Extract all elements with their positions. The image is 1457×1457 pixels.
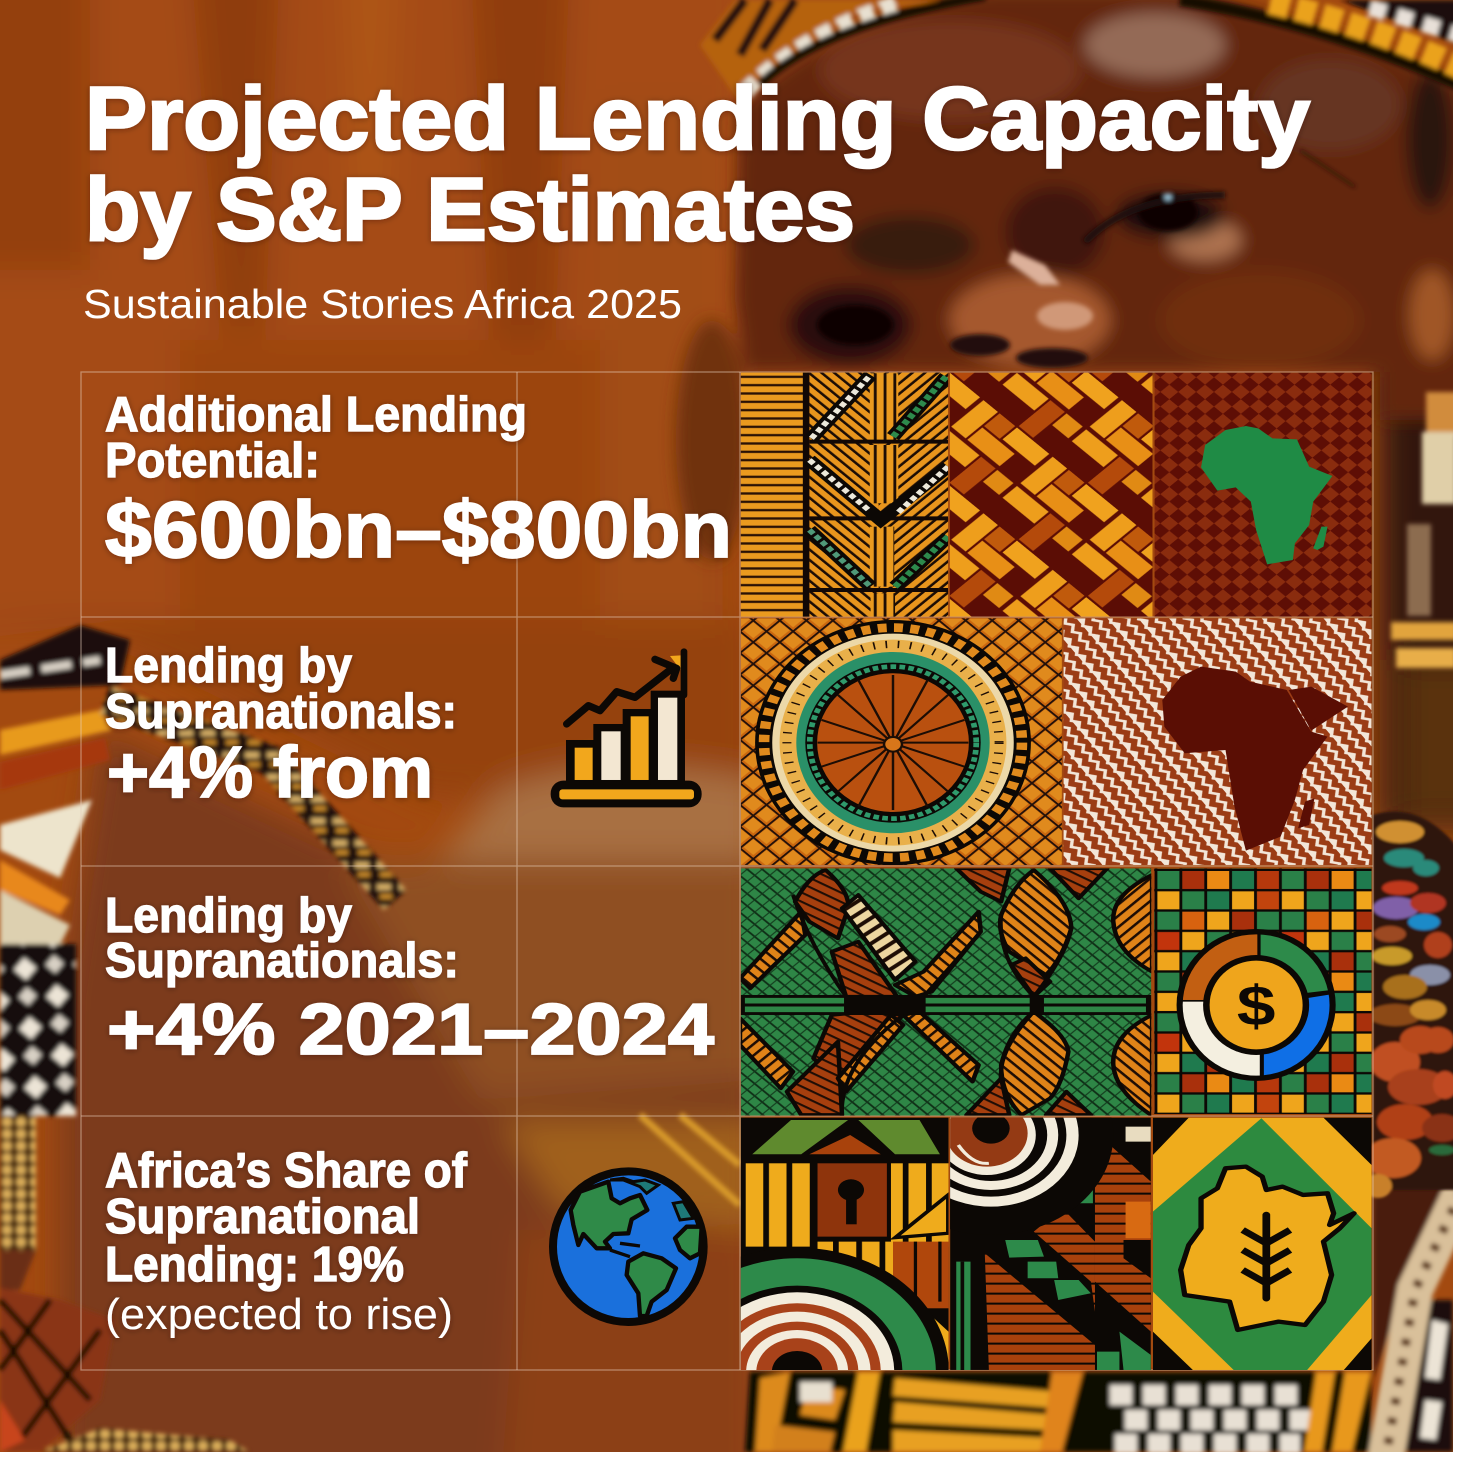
row 2 text: lending by supranationals: Supranationals: [105, 685, 457, 739]
row 2 text: lending by supranationals: Lending by [105, 639, 352, 693]
row 3 text: lending by supranationals 2021-2024: Supranationals: [105, 934, 459, 988]
row 3 text: lending by supranationals 2021-2024: +4% 2021–2024 [107, 990, 714, 1070]
row 1 text: additional lending potential: Additional Lending [105, 388, 527, 442]
pattern tiles mosaic [740, 372, 1372, 1370]
tile: zigzag with dark Africa [1064, 618, 1372, 865]
row 4 text: africa's share [105, 1144, 468, 1339]
tile: chevron beads pattern [740, 370, 950, 618]
tile: green and orange leaf weave [740, 868, 1152, 1118]
row 4 text: africa's share: Lending: 19% [105, 1238, 404, 1292]
tile: green diamond with amber map and wheat [1153, 1118, 1372, 1370]
title [85, 68, 1311, 259]
tile: concentric rings and triangles [950, 1118, 1151, 1370]
tile: interlocking orange brick pattern [950, 373, 1152, 617]
tile: diamonds with green Africa [1155, 373, 1372, 617]
tile: concentric sun medallion [741, 618, 1062, 865]
row 1 text: additional lending potential: $600bn–$800bn [105, 485, 732, 574]
row 1 text: additional lending potential: Potential: [105, 434, 320, 488]
title: Projected Lending Capacity [85, 68, 1311, 168]
row 3 text: lending by supranationals 2021-2024 [105, 889, 714, 1070]
tile: mosaic with dollar ring chart [1154, 868, 1372, 1114]
row 2 text: lending by supranationals [105, 639, 457, 813]
row 4 text: africa's share: Supranational [105, 1190, 420, 1244]
subtitle: Sustainable Stories Africa 2025 [83, 281, 682, 327]
row 3 text: lending by supranationals 2021-2024: Lending by [105, 889, 352, 943]
icon: rising bar chart [551, 652, 702, 807]
beads necklace [1372, 810, 1453, 1200]
tile: house with keyhole and arcs [740, 1118, 948, 1370]
row 4 text: africa's share: (expected to rise) [105, 1290, 453, 1339]
row 1 text: additional lending potential [105, 388, 732, 574]
tile: mosaic with dollar ring chart: $ [1237, 976, 1275, 1038]
table grid lines [81, 372, 1373, 1370]
row 2 text: lending by supranationals: +4% from [107, 733, 433, 813]
icon: globe [553, 1171, 704, 1322]
title: by S&P Estimates [85, 159, 855, 259]
row 4 text: africa's share: Africa’s Share of [105, 1144, 468, 1198]
